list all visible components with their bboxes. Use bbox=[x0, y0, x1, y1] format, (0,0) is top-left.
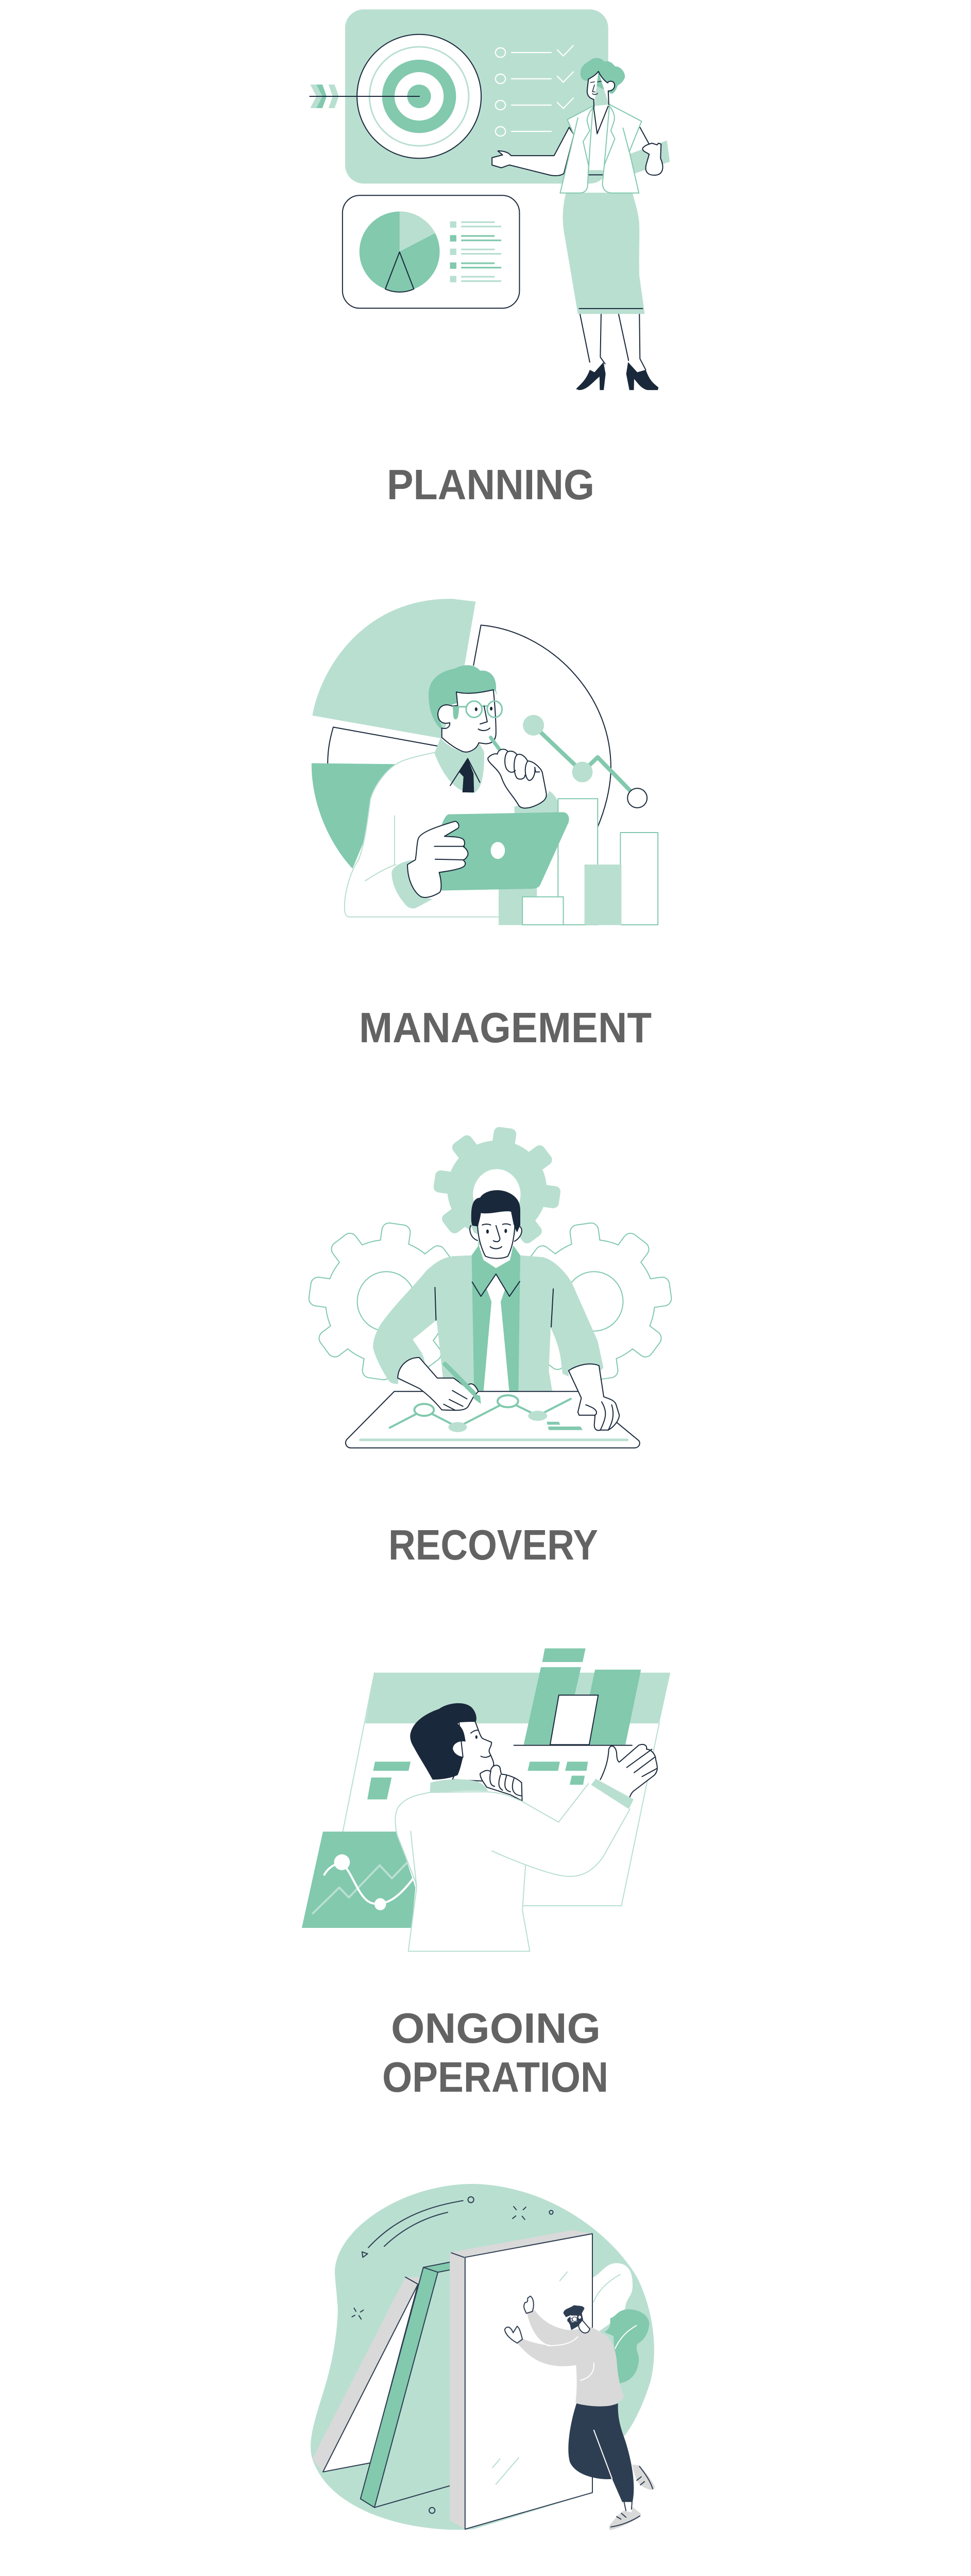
hand with pen bbox=[398, 1358, 481, 1410]
chart: pie wedges bbox=[312, 599, 611, 869]
figure: man bbox=[395, 1703, 634, 1951]
section: ongoing operation bbox=[302, 1649, 671, 2101]
heading: planning: PLANNING bbox=[387, 461, 594, 509]
heading: recovery: RECOVERY bbox=[388, 1521, 598, 1569]
chart: bars bbox=[499, 799, 598, 925]
background blob bbox=[311, 2184, 654, 2530]
chart: line graph card bbox=[302, 1832, 415, 1928]
panel: desk with chart bbox=[346, 1392, 640, 1448]
figure: man bbox=[373, 1190, 604, 1391]
illustration: man with gears at desk bbox=[308, 1127, 672, 1449]
illustration: man at dashboard bbox=[302, 1649, 671, 1952]
figure: pushing man bbox=[505, 2296, 655, 2530]
section: management bbox=[311, 599, 658, 1052]
back panel bbox=[312, 2277, 422, 2472]
heading: ongoing: ONGOING bbox=[391, 2004, 601, 2052]
icon: tablet bbox=[439, 812, 569, 891]
panel: dashboard screen bbox=[343, 1673, 670, 1906]
chart: front bars bbox=[522, 833, 658, 925]
figure: presenter bbox=[492, 58, 670, 390]
hand on desk bbox=[569, 1364, 619, 1430]
icon: target bbox=[357, 35, 481, 158]
heading: operation: OPERATION bbox=[382, 2053, 608, 2101]
icon: light gear bbox=[425, 1119, 568, 1260]
decorative marks bbox=[352, 2197, 553, 2513]
chart: bars on shelf bbox=[514, 1648, 641, 1745]
middle panel bbox=[361, 2262, 452, 2507]
section: recovery bbox=[308, 1127, 672, 1569]
checklist bbox=[496, 45, 573, 136]
heading: management: MANAGEMENT bbox=[359, 1004, 652, 1052]
illustration: man holding falling panels bbox=[311, 2183, 655, 2530]
front panel bbox=[450, 2230, 592, 2529]
section: planning bbox=[309, 9, 670, 509]
panel: goals board bbox=[345, 9, 608, 183]
illustration: woman presenting target bbox=[309, 9, 670, 391]
illustration: man with tablet and charts bbox=[311, 599, 658, 925]
leaves bbox=[592, 2263, 649, 2384]
section: resilience bbox=[311, 2183, 655, 2530]
figure: man bbox=[345, 665, 562, 917]
panel: pie chart card bbox=[343, 195, 519, 308]
icon: arrow bbox=[310, 84, 419, 108]
hand holding tablet bbox=[391, 821, 468, 908]
icon: outline gear left bbox=[300, 1214, 473, 1389]
icon: outline gear right bbox=[507, 1214, 680, 1389]
chart: trend line bbox=[523, 715, 647, 808]
hand touching shelf bbox=[600, 1744, 657, 1798]
